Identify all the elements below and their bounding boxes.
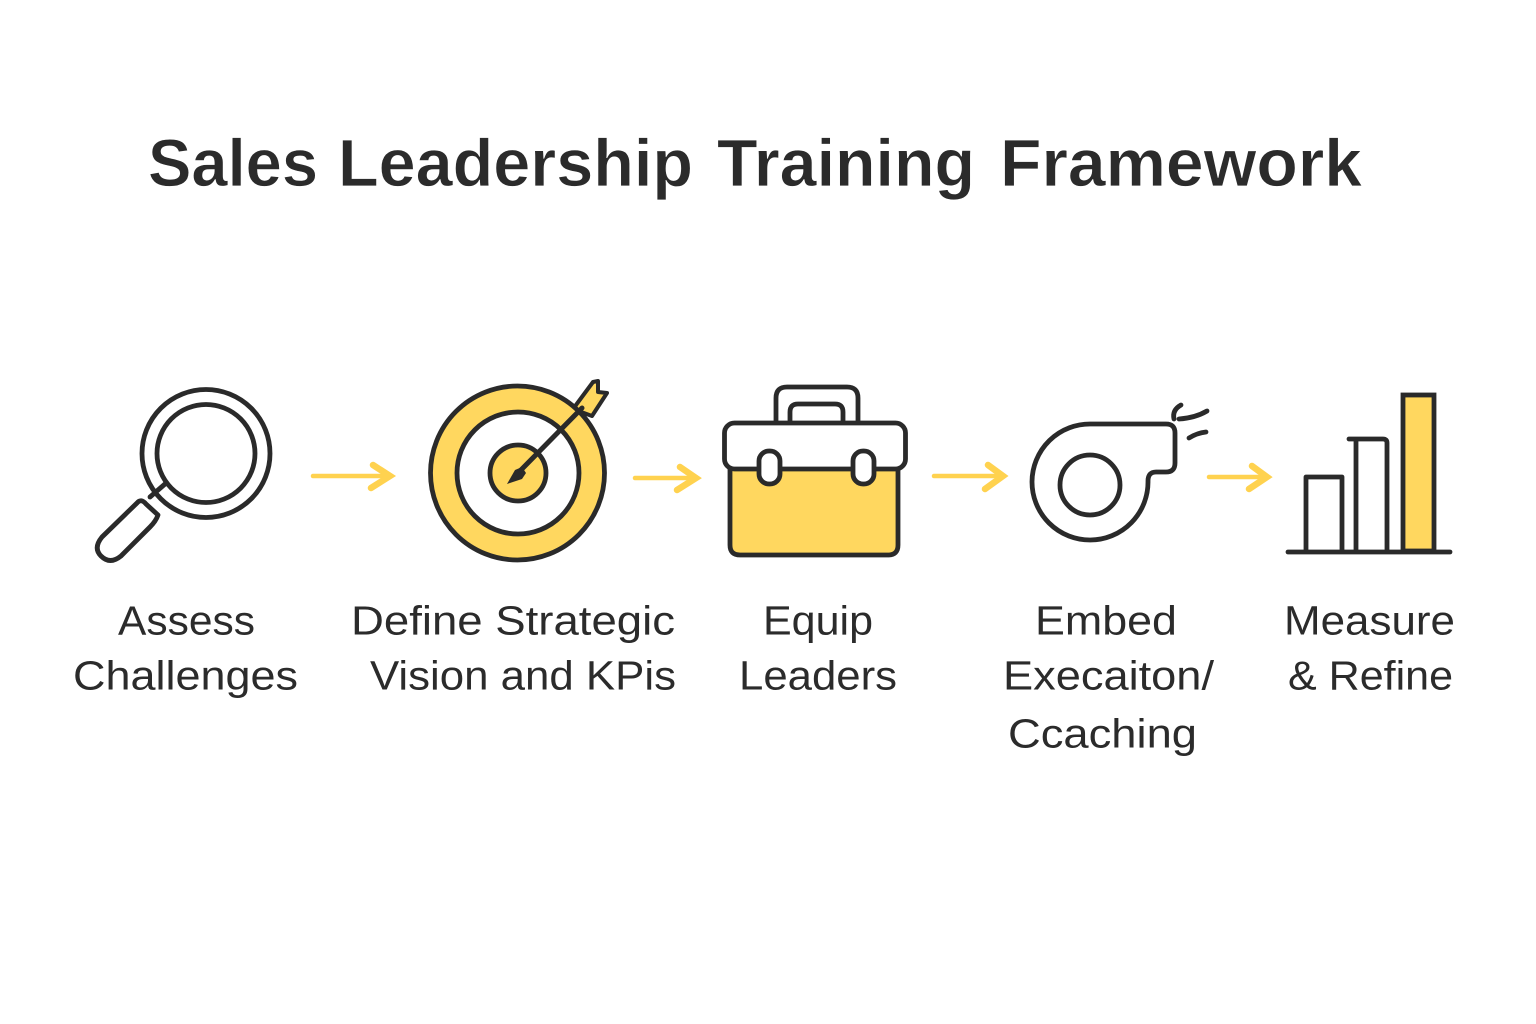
label: Equip Leaders: Equip — [763, 598, 873, 644]
title: Training — [717, 126, 975, 201]
icon: whistle — [1032, 405, 1207, 540]
icon: bar chart — [1288, 395, 1450, 552]
label: Assess Challenges: Assess — [118, 598, 255, 644]
icon: target with arrow — [430, 381, 607, 560]
arrow 1 — [313, 465, 390, 488]
title: Leadership — [338, 126, 693, 201]
step 2: define strategic vision — [351, 381, 676, 698]
step 1: assess challenges — [73, 390, 298, 698]
title: Framework — [1000, 126, 1363, 201]
title — [148, 126, 1363, 201]
label: Define Strategic Vision and KPis: Define Strategic — [351, 598, 675, 644]
label: Embed Execaiton/ Ccaching: Embed — [1035, 598, 1177, 644]
label: Measure & Refine: Measure — [1284, 598, 1455, 644]
label: Measure & Refine: & Refine — [1288, 652, 1453, 698]
arrow 4 — [1209, 466, 1267, 489]
icon: briefcase — [724, 387, 906, 555]
arrow 2 — [635, 467, 696, 490]
label: Define Strategic Vision and KPis — [351, 598, 676, 698]
step 3: equip leaders — [724, 387, 906, 698]
label: Define Strategic Vision and KPis: Vision and KPis — [370, 652, 676, 698]
icon: magnifying glass — [97, 390, 270, 560]
label: Assess Challenges — [73, 598, 298, 698]
label: Equip Leaders — [739, 598, 897, 698]
label: Equip Leaders: Leaders — [739, 652, 897, 698]
label: Assess Challenges: Challenges — [73, 652, 298, 698]
label: Measure & Refine — [1284, 598, 1455, 698]
label: Embed Execaiton/ Ccaching — [1003, 598, 1215, 756]
label: Embed Execaiton/ Ccaching: Execaiton/ — [1003, 652, 1215, 698]
arrow 3 — [934, 465, 1003, 489]
title: Sales — [148, 126, 318, 201]
label: Embed Execaiton/ Ccaching: Ccaching — [1008, 710, 1197, 756]
step 4: embed execution coaching — [1003, 405, 1215, 756]
step 5: measure and refine — [1284, 395, 1455, 698]
